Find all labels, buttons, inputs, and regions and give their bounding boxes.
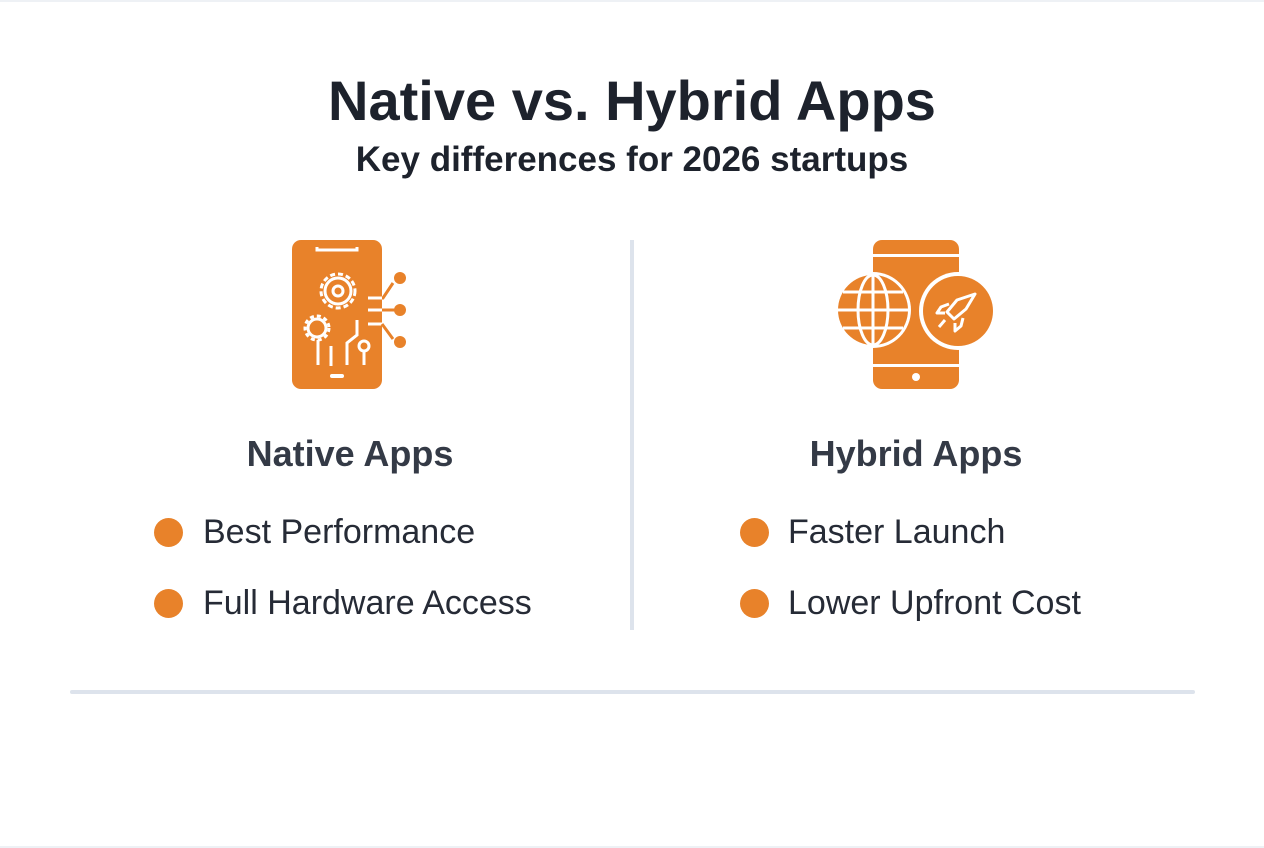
divider xyxy=(630,240,634,630)
heading: hybrid: Hybrid Apps xyxy=(810,433,1022,474)
bullet: best performance: Best Performance xyxy=(203,513,475,551)
heading: native: Native Apps xyxy=(247,433,453,474)
bullet: lower upfront cost: Lower Upfront Cost xyxy=(788,584,1081,622)
icon: native phone xyxy=(292,240,406,389)
bullet: faster launch: Faster Launch xyxy=(788,513,1005,551)
title: Native vs. Hybrid Apps xyxy=(328,69,936,132)
icon: hybrid phone xyxy=(838,240,993,389)
bottom rule xyxy=(70,690,1195,694)
bullet: full hardware access: Full Hardware Access xyxy=(203,584,532,622)
subtitle: Key differences for 2026 startups xyxy=(356,140,908,179)
